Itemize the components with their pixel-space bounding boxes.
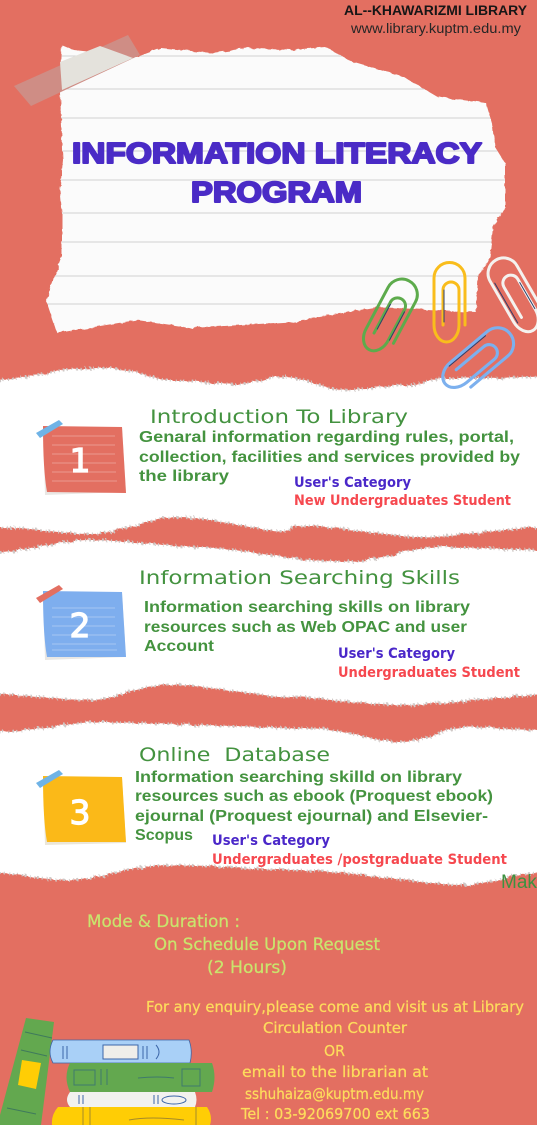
heading: Information Searching Skills bbox=[139, 567, 460, 589]
sticky note 1: 1 bbox=[70, 441, 90, 480]
clipped stray text: Mak bbox=[501, 872, 537, 893]
header: library name and website: AL--KHAWARIZMI LIBRARY bbox=[344, 3, 527, 18]
enquiry contact details: OR bbox=[324, 1042, 345, 1060]
user's category bbox=[338, 646, 520, 681]
mode and duration: On Schedule Upon Request bbox=[154, 935, 380, 955]
description: Information searching skills on library bbox=[144, 599, 470, 616]
enquiry contact details: For any enquiry,please come and visit us at Library bbox=[146, 998, 524, 1016]
sticky note 2: 2 bbox=[70, 606, 90, 645]
paperclip: blue bbox=[437, 321, 520, 398]
title: INFORMATION LITERACY bbox=[72, 138, 482, 170]
paperclip: green bbox=[358, 274, 423, 358]
description: Genaral information regarding rules, portal, bbox=[139, 429, 514, 446]
user's category: New Undergraduates Student bbox=[294, 493, 511, 509]
panel: section 3 bbox=[36, 744, 507, 868]
heading: Introduction To Library bbox=[150, 406, 408, 428]
title bbox=[72, 138, 482, 209]
washi tape bbox=[14, 35, 140, 106]
white book bbox=[67, 1092, 196, 1107]
yellow book bbox=[52, 1107, 211, 1125]
green book bbox=[66, 1063, 214, 1092]
leaning green book bbox=[0, 1018, 54, 1125]
sticky note 2 bbox=[36, 585, 126, 660]
description: resources such as Web OPAC and user bbox=[144, 619, 467, 636]
description bbox=[144, 599, 470, 655]
description: ejournal (Proquest ejournal) and Elsevier- bbox=[135, 808, 488, 825]
user's category bbox=[212, 833, 507, 868]
user's category: User's Category bbox=[212, 833, 330, 849]
torn lined paper bbox=[46, 45, 510, 333]
enquiry contact details: Tel : 03-92069700 ext 663 bbox=[240, 1105, 430, 1123]
mode and duration bbox=[87, 912, 380, 978]
user's category bbox=[294, 475, 511, 509]
icon: stack of books bbox=[0, 1018, 214, 1125]
sticky note 3: 3 bbox=[70, 793, 90, 832]
description: Account bbox=[144, 638, 215, 655]
header: library name and website bbox=[344, 3, 527, 36]
user's category: User's Category bbox=[338, 646, 455, 662]
enquiry contact details: email to the librarian at bbox=[242, 1063, 428, 1081]
enquiry contact details bbox=[146, 998, 524, 1123]
user's category: Undergraduates Student bbox=[338, 665, 520, 681]
paperclip: white bbox=[482, 252, 537, 337]
blue book bbox=[50, 1040, 191, 1063]
description: collection, facilities and services provided by bbox=[139, 449, 520, 466]
header: library name and website: www.library.kuptm.edu.my bbox=[350, 21, 521, 36]
description: resources such as ebook (Proquest ebook) bbox=[135, 788, 493, 805]
description bbox=[139, 429, 520, 485]
white torn bands bbox=[0, 368, 537, 885]
description bbox=[135, 769, 493, 844]
mode and duration: Mode & Duration : bbox=[87, 912, 240, 932]
user's category: User's Category bbox=[294, 475, 411, 491]
enquiry contact details: sshuhaiza@kuptm.edu.my bbox=[245, 1085, 424, 1103]
panel: section 1 bbox=[36, 406, 520, 509]
user's category: Undergraduates /postgraduate Student bbox=[212, 852, 507, 868]
sticky note 1 bbox=[36, 420, 126, 495]
panel: section 2 bbox=[36, 567, 520, 681]
title: PROGRAM bbox=[191, 177, 362, 209]
heading: Online Database bbox=[139, 744, 330, 766]
description: Scopus bbox=[135, 827, 193, 844]
paperclip: yellow bbox=[434, 262, 465, 342]
description: Information searching skilld on library bbox=[135, 769, 462, 786]
enquiry contact details: Circulation Counter bbox=[263, 1019, 408, 1037]
description: the library bbox=[139, 468, 229, 485]
mode and duration: (2 Hours) bbox=[207, 958, 287, 978]
sticky note 3 bbox=[36, 770, 126, 845]
